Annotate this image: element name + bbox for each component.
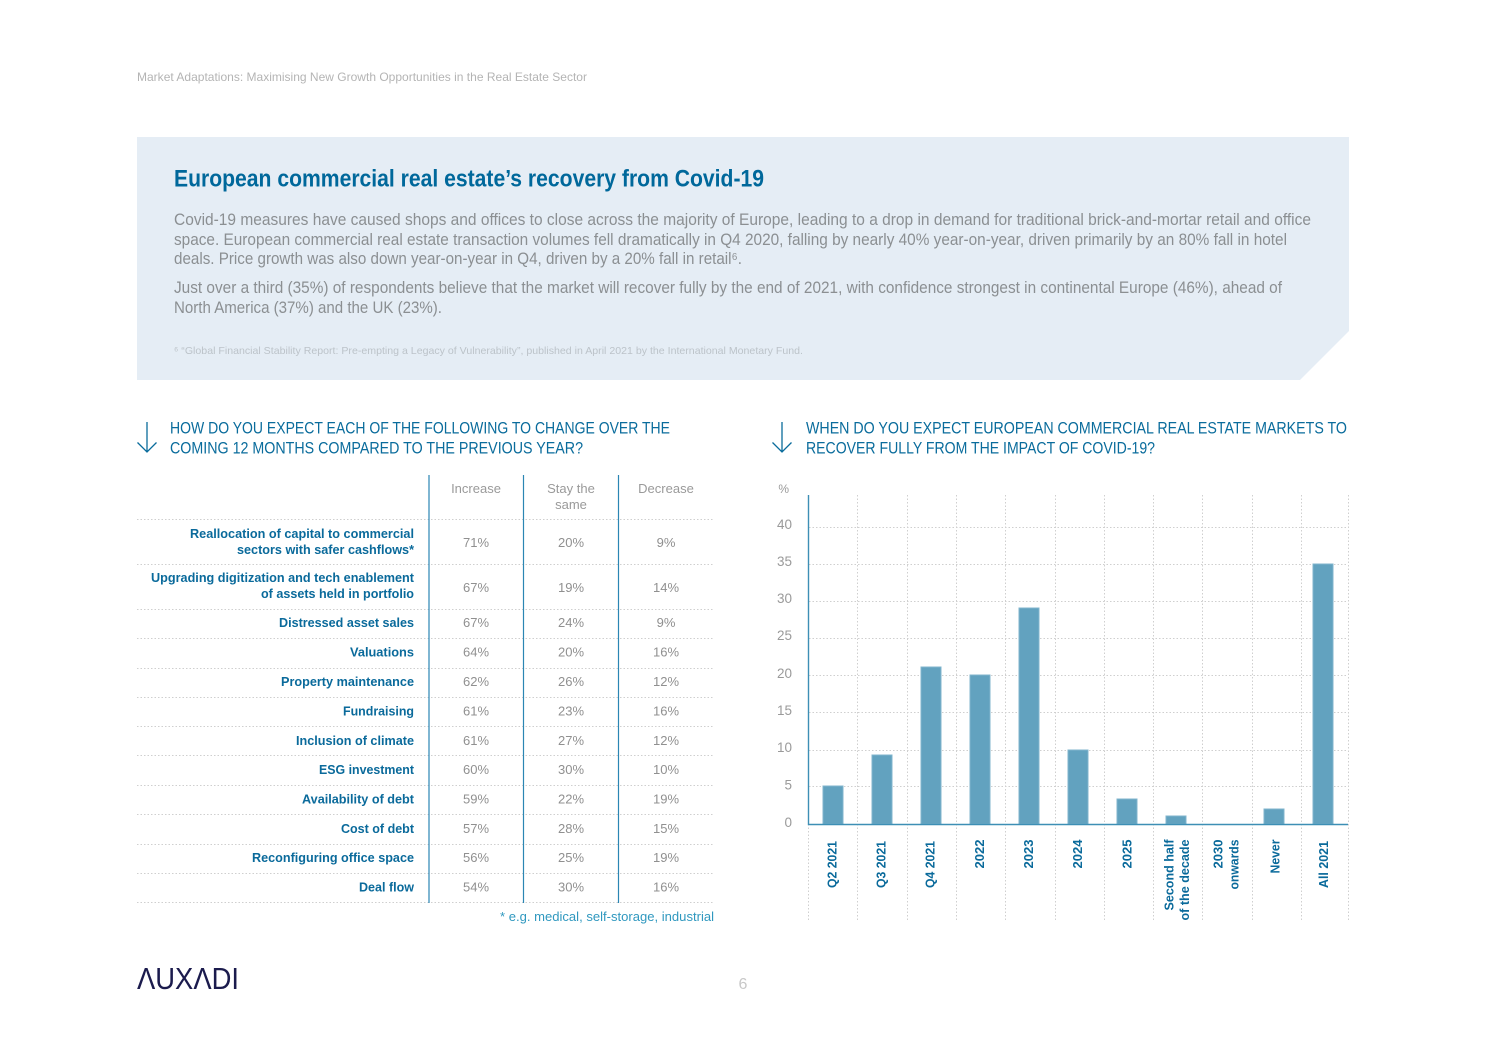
y axis labels: 30	[777, 591, 792, 606]
page number: 6	[739, 976, 748, 993]
table values: 19%	[558, 580, 584, 595]
table row labels: Fundraising	[343, 704, 414, 718]
bars	[823, 564, 1333, 824]
table values: 67%	[463, 615, 489, 630]
table column headers: same	[555, 497, 587, 512]
y axis labels: 35	[777, 554, 792, 569]
y axis labels: 10	[777, 740, 792, 755]
x axis labels: 2023	[1021, 840, 1036, 869]
table values: 30%	[558, 762, 584, 777]
table row labels: Cost of debt	[341, 821, 415, 836]
left chart question	[170, 420, 670, 458]
x axis labels: onwards	[1226, 840, 1242, 890]
x axis labels: 2022	[972, 840, 987, 869]
x axis labels: 2024	[1070, 839, 1085, 869]
table values: 71%	[463, 535, 489, 550]
left chart question: HOW DO YOU EXPECT EACH OF THE FOLLOWING TO CHANGE OVER THE	[170, 420, 670, 438]
table values: 28%	[558, 821, 584, 836]
table row labels: ESG investment	[319, 762, 415, 777]
x axis labels	[824, 839, 1331, 920]
table values: 25%	[558, 850, 584, 865]
table values: 24%	[558, 615, 584, 630]
table values: 26%	[558, 674, 584, 689]
y axis labels: 40	[777, 517, 792, 532]
y axis labels: 20	[777, 666, 792, 681]
y axis labels	[777, 482, 792, 830]
table values: 16%	[653, 704, 679, 718]
paragraph: market impact: space. European commercial real estate transaction volumes fell dramatically in Q4 2020, falling by nearly 40% year-on-year, driven primarily by an 80% fall in hotel	[174, 231, 1287, 249]
y axis labels: 0	[784, 815, 792, 830]
table values: 60%	[463, 762, 489, 777]
table row labels: Reallocation of capital to commercial	[190, 526, 414, 541]
table values	[463, 535, 679, 894]
footnote: ⁶ “Global Financial Stability Report: Pre-empting a Legacy of Vulnerability”, published in April 2021 by the International Monetary Fund.	[174, 345, 803, 357]
x axis labels: of the decade	[1177, 840, 1192, 920]
table values: 23%	[558, 704, 584, 718]
table values: 54%	[463, 880, 489, 894]
table row labels: Upgrading digitization and tech enablement	[151, 570, 415, 585]
x axis labels: Second half	[1162, 839, 1176, 910]
table values: 20%	[558, 535, 584, 550]
table values: 27%	[558, 733, 584, 748]
panel: introduction	[137, 137, 1349, 380]
table values: 19%	[653, 850, 679, 865]
x axis labels: Q4 2021	[922, 841, 938, 888]
y axis labels: %	[778, 482, 789, 496]
x axis labels: 2030	[1210, 840, 1226, 869]
table column headers: Increase	[451, 481, 501, 496]
paragraph: market impact: deals. Price growth was also down year-on-year in Q4, driven by a 20% fall in retail⁶.	[174, 250, 742, 268]
icon: right down arrow	[772, 422, 792, 452]
table note: * e.g. medical, self-storage, industrial	[500, 909, 714, 924]
table values: 62%	[463, 674, 489, 689]
table values: 19%	[653, 792, 679, 806]
table values: 61%	[463, 704, 489, 718]
table column headers	[451, 481, 694, 512]
right chart question: WHEN DO YOU EXPECT EUROPEAN COMMERCIAL REAL ESTATE MARKETS TO	[806, 420, 1347, 438]
right chart question: RECOVER FULLY FROM THE IMPACT OF COVID-19?	[806, 440, 1155, 458]
table values: 20%	[558, 644, 584, 660]
table values: 30%	[558, 880, 584, 894]
table row labels: Deal flow	[359, 880, 415, 894]
table values: 16%	[653, 880, 679, 894]
table values: 14%	[653, 580, 679, 595]
x axis labels: Q3 2021	[874, 841, 888, 888]
table values: 15%	[653, 821, 679, 836]
table values: 12%	[653, 674, 679, 689]
table values: 67%	[463, 580, 489, 595]
paragraph: respondent confidence	[174, 279, 1282, 317]
table: expected change over 12 months	[137, 475, 714, 903]
table row labels: of assets held in portfolio	[261, 586, 414, 601]
table values: 9%	[657, 615, 676, 630]
y axis labels: 5	[784, 778, 792, 792]
icon: left down arrow	[138, 422, 156, 452]
x axis labels: All 2021	[1316, 841, 1331, 888]
running header: Market Adaptations: Maximising New Growth Opportunities in the Real Estate Sector	[137, 70, 587, 84]
table row labels	[151, 526, 415, 894]
table values: 57%	[463, 821, 489, 836]
left chart question: COMING 12 MONTHS COMPARED TO THE PREVIOUS YEAR?	[170, 440, 583, 458]
table values: 12%	[653, 733, 679, 748]
table row labels: Property maintenance	[281, 674, 414, 689]
table row labels: Valuations	[350, 644, 414, 660]
paragraph: market impact	[174, 211, 1311, 268]
chart axes	[808, 495, 1348, 824]
table column headers: Stay the	[547, 481, 595, 496]
table row labels: Distressed asset sales	[279, 615, 414, 630]
table row labels: Inclusion of climate	[296, 733, 414, 748]
table values: 59%	[463, 792, 489, 806]
paragraph: market impact: Covid-19 measures have caused shops and offices to close across the majority of Europe, leading to a drop in demand for traditional brick-and-mortar retail and office	[174, 211, 1311, 229]
table values: 61%	[463, 733, 489, 748]
y axis labels: 25	[777, 628, 792, 643]
x axis labels: Q2 2021	[824, 841, 840, 888]
x axis labels: Never	[1268, 840, 1282, 874]
heading: European commercial real estate’s recovery from Covid-19	[174, 166, 764, 192]
logo: ΛUXΛDI	[137, 961, 239, 996]
table values: 22%	[558, 792, 584, 806]
table values: 10%	[653, 762, 679, 777]
table row labels: sectors with safer cashflows*	[237, 542, 415, 557]
paragraph: respondent confidence: Just over a third (35%) of respondents believe that the market will recover fully by the end of 2021, with confidence strongest in continental Europe (46%), ahead of	[174, 279, 1282, 297]
table values: 16%	[653, 644, 679, 660]
x axis labels: 2025	[1120, 840, 1134, 869]
bar chart: expected recovery timing	[777, 482, 1348, 920]
table column headers: Decrease	[638, 481, 694, 496]
paragraph: respondent confidence: North America (37%) and the UK (23%).	[174, 299, 442, 317]
table row labels: Reconfiguring office space	[252, 850, 414, 865]
table values: 56%	[463, 850, 489, 865]
y axis labels: 15	[777, 703, 792, 718]
table values: 9%	[657, 535, 676, 550]
table values: 64%	[463, 644, 489, 660]
right chart question	[806, 420, 1347, 458]
table row labels: Availability of debt	[302, 792, 415, 806]
